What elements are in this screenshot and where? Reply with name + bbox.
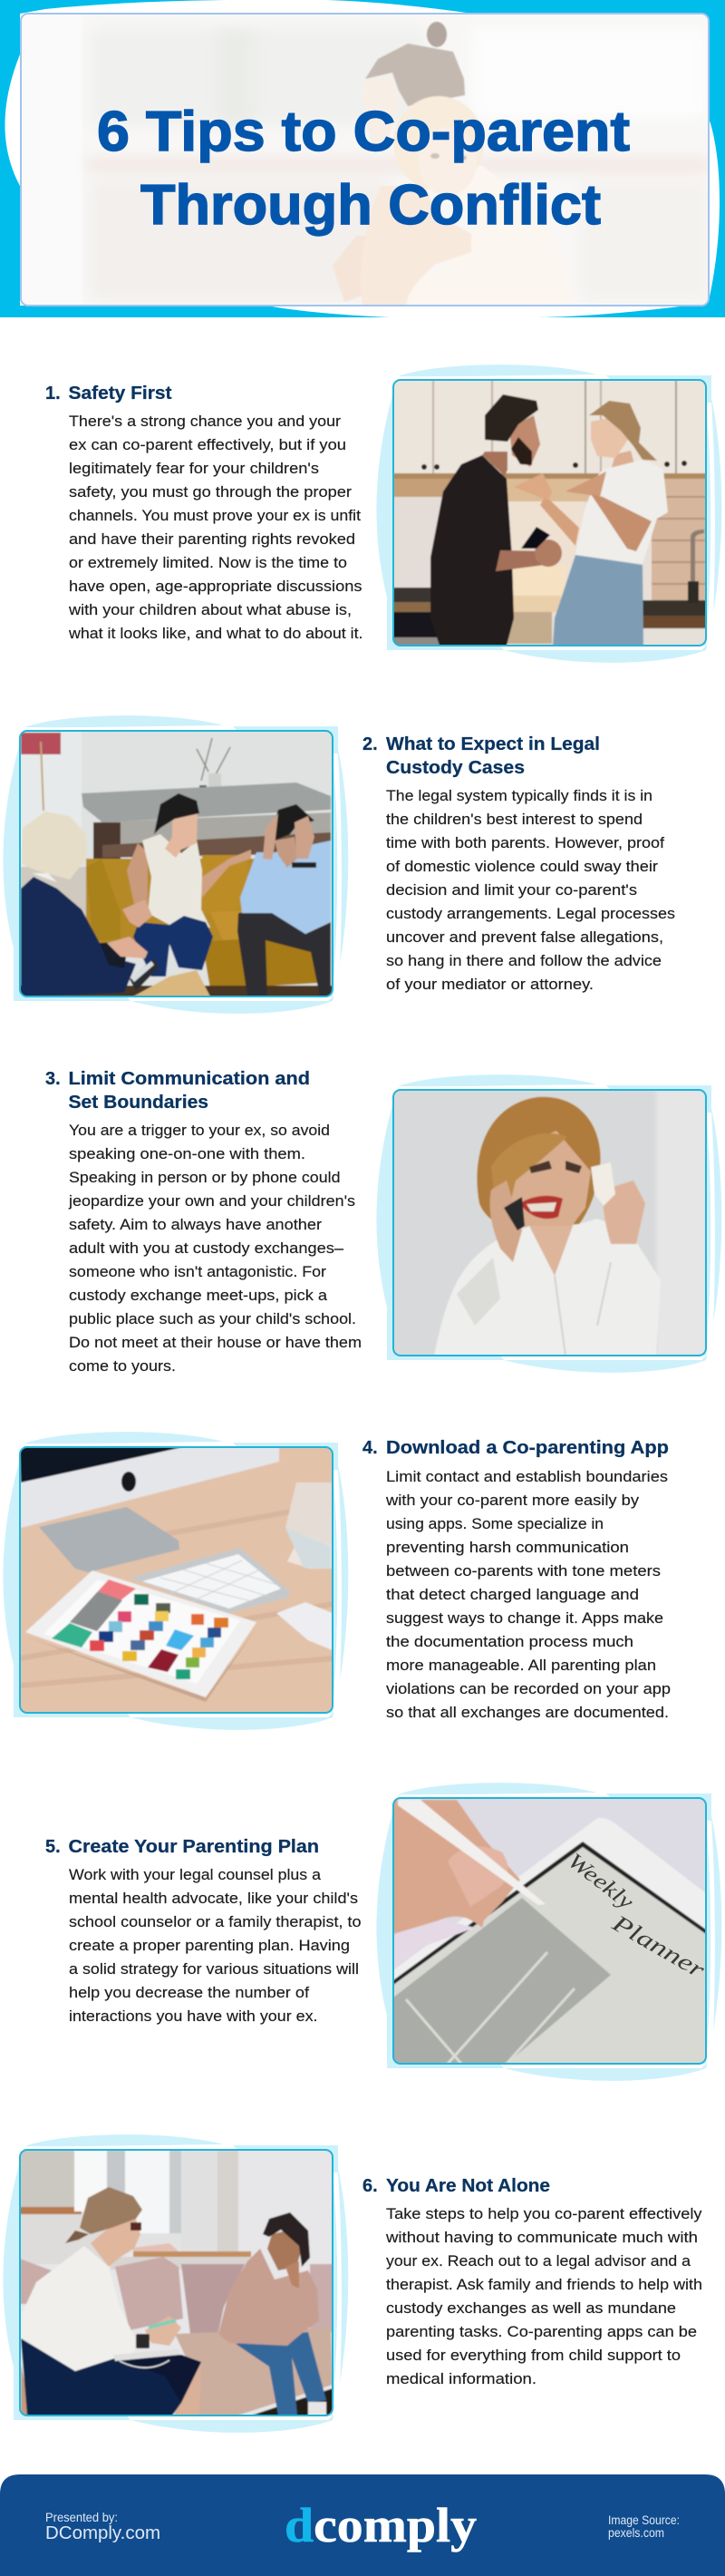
tip 5 body text: a solid strategy for various situations will [69,1961,359,1978]
tip 5 body text: Work with your legal counsel plus a [69,1867,322,1883]
tip 6 photo: therapist with teenager on sofa [3,2134,348,2433]
panel: tip 5 parenting plan [45,1783,721,2081]
tip 6 body text: used for everything from child support to [386,2348,681,2364]
tip 2 body text: the children's best interest to spend [386,812,643,828]
tip 6 heading: 6. [362,2176,378,2196]
tip 1 body text [68,413,363,642]
presented by credit [45,2510,160,2543]
tip 4 body text: preventing harsh communication [386,1540,629,1556]
tip 3 body text: safety. Aim to always have another [69,1217,323,1233]
tip 4 body text: so that all exchanges are documented. [386,1705,669,1721]
tip 4 body text: with your co-parent more easily by [385,1492,640,1509]
dcomply logo: dcomply [285,2498,477,2552]
tip 3 body text: Do not meet at their house or have them [69,1335,362,1351]
header white blob [5,0,720,317]
tip 1 body text: There's a strong chance you and your [69,413,342,430]
tip 3 body text: come to yours. [69,1358,176,1375]
tip 5 photo: tablet with weekly planner: Weekly [563,1849,638,1915]
presented by credit: DComply.com [45,2523,160,2543]
tip 5 heading: 5. [45,1837,61,1857]
tip 5 photo: tablet with weekly planner [376,1783,721,2081]
header cyan background [0,0,725,317]
header box outline [21,14,709,306]
tip 2 body text: decision and limit your co-parent's [386,882,637,899]
tip 6 body text: Take steps to help you co-parent effectively [386,2206,702,2222]
tip 4 heading: 4. [362,1438,378,1458]
tip 6 body text: parenting tasks. Co-parenting apps can be [386,2324,697,2340]
tip 3 heading: Set Boundaries [69,1093,208,1113]
tip 2 body text [386,788,675,993]
tip 2 heading: 2. [362,734,378,754]
panel: tip 3 boundaries [45,1069,721,1375]
tip 6 heading: You Are Not Alone [386,2176,550,2196]
tip 5 body text: help you decrease the number of [69,1985,309,2001]
title [97,101,630,237]
tip 4 body text: that detect charged language and [386,1587,639,1603]
tip 2 body text: The legal system typically finds it is in [386,788,652,804]
footer background [0,2474,725,2576]
tip 1 body text: or extremely limited. Now is the time to [69,555,347,571]
tip 5 body text: create a proper parenting plan. Having [69,1938,350,1954]
tip 4 body text: more manageable. All parenting plan [386,1657,656,1674]
tip 3 body text: adult with you at custody exchanges– [69,1240,344,1257]
tip 3 body text: jeopardize your own and your children's [68,1193,355,1210]
title: 6 Tips to Co-parent [97,101,630,163]
tip 5 body text: school counselor or a family therapist, to [69,1914,362,1930]
image source credit: pexels.com [608,2526,664,2540]
tip 5 heading: Create Your Parenting Plan [69,1837,319,1857]
tip 1 body text: have open, age-appropriate discussions [69,578,362,595]
tip 4 body text: Limit contact and establish boundaries [386,1469,668,1485]
panel: header [0,0,725,317]
tip 4 photo: tablet and desktop on desk [3,1432,348,1730]
tip 5 photo: tablet with weekly planner: Planner [607,1909,710,1984]
tip 3 body text: public place such as your child's school. [69,1311,356,1327]
tip 2 photo: couple with mediator on yellow sofa [3,715,348,1014]
tip 3 photo: upset woman on phone [376,1074,721,1373]
tip 1 body text: what it looks like, and what to do about it. [68,626,363,642]
presented by credit: Presented by: [45,2510,118,2524]
tip 6 body text [385,2206,702,2387]
tip 4 body text: the documentation process much [386,1634,633,1650]
tip 6 body text: your ex. Reach out to a legal advisor and a [386,2253,691,2270]
tip 3 body text [68,1123,362,1375]
tip 3 body text: speaking one-on-one with them. [69,1146,305,1162]
tip 3 body text: custody exchange meet-ups, pick a [69,1288,328,1304]
tip 2 body text: uncover and prevent false allegations, [386,929,663,946]
tip 2 body text: of domestic violence could sway their [386,859,659,875]
tip 1 heading: Safety First [69,384,172,403]
tip 4 body text: between co-parents with tone meters [386,1563,661,1580]
tip 2 heading: Custody Cases [386,758,525,778]
tip 4 body text: violations can be recorded on your app [386,1681,671,1697]
panel: footer [0,2474,725,2576]
tip 1 heading: 1. [45,384,61,403]
tip 6 body text: without having to communicate much with [385,2230,698,2246]
header faded photo [21,14,709,306]
tip 1 body text: channels. You must prove your ex is unfit [69,508,361,524]
tip 2 heading: What to Expect in Legal [386,734,600,754]
tip 2 body text: of your mediator or attorney. [386,977,594,993]
tip 5 body text [69,1867,362,2025]
tip 1 photo: arguing couple in kitchen [376,365,721,663]
tip 2 body text: custody arrangements. Legal processes [386,906,675,922]
tip 1 body text: safety, you must go through the proper [69,484,353,501]
panel: tip 1 safety first [45,365,721,663]
tip 6 body text: custody exchanges as well as mundane [386,2300,676,2317]
tip 5 body text: interactions you have with your ex. [69,2008,317,2025]
panel: tip 4 co-parenting app [3,1432,671,1730]
tip 3 body text: You are a trigger to your ex, so avoid [69,1123,330,1139]
tip 6 body text: medical information. [386,2371,536,2387]
image source credit [608,2513,680,2540]
tip 3 heading: 3. [45,1069,61,1089]
tip 4 body text: suggest ways to change it. Apps make [386,1610,663,1627]
tip 2 body text: time with both parents. However, proof [386,835,664,851]
panel: tip 6 not alone [3,2134,702,2433]
tip 5 body text: mental health advocate, like your child's [69,1891,358,1907]
tip 2 heading [362,734,600,778]
tip 4 body text [385,1469,671,1721]
tip 4 heading: Download a Co-parenting App [386,1438,669,1458]
image source credit: Image Source: [608,2513,680,2527]
tip 6 body text: therapist. Ask family and friends to help with [386,2277,702,2293]
panel: tip 2 legal custody [3,715,675,1014]
tip 3 body text: Speaking in person or by phone could [69,1170,341,1186]
tip 3 body text: someone who isn't antagonistic. For [69,1264,327,1280]
title: Through Conflict [140,174,601,237]
tip 4 body text: using apps. Some specialize in [386,1516,604,1532]
tip 3 heading [45,1069,310,1113]
tip 2 body text: so hang in there and follow the advice [386,953,662,969]
tip 3 heading: Limit Communication and [69,1069,310,1089]
tip 1 body text: legitimately fear for your children's [69,461,319,477]
tip 1 body text: and have their parenting rights revoked [69,531,355,548]
tip 1 body text: ex can co-parent effectively, but if you [69,437,346,453]
tip 1 body text: with your children about what abuse is, [68,602,352,618]
